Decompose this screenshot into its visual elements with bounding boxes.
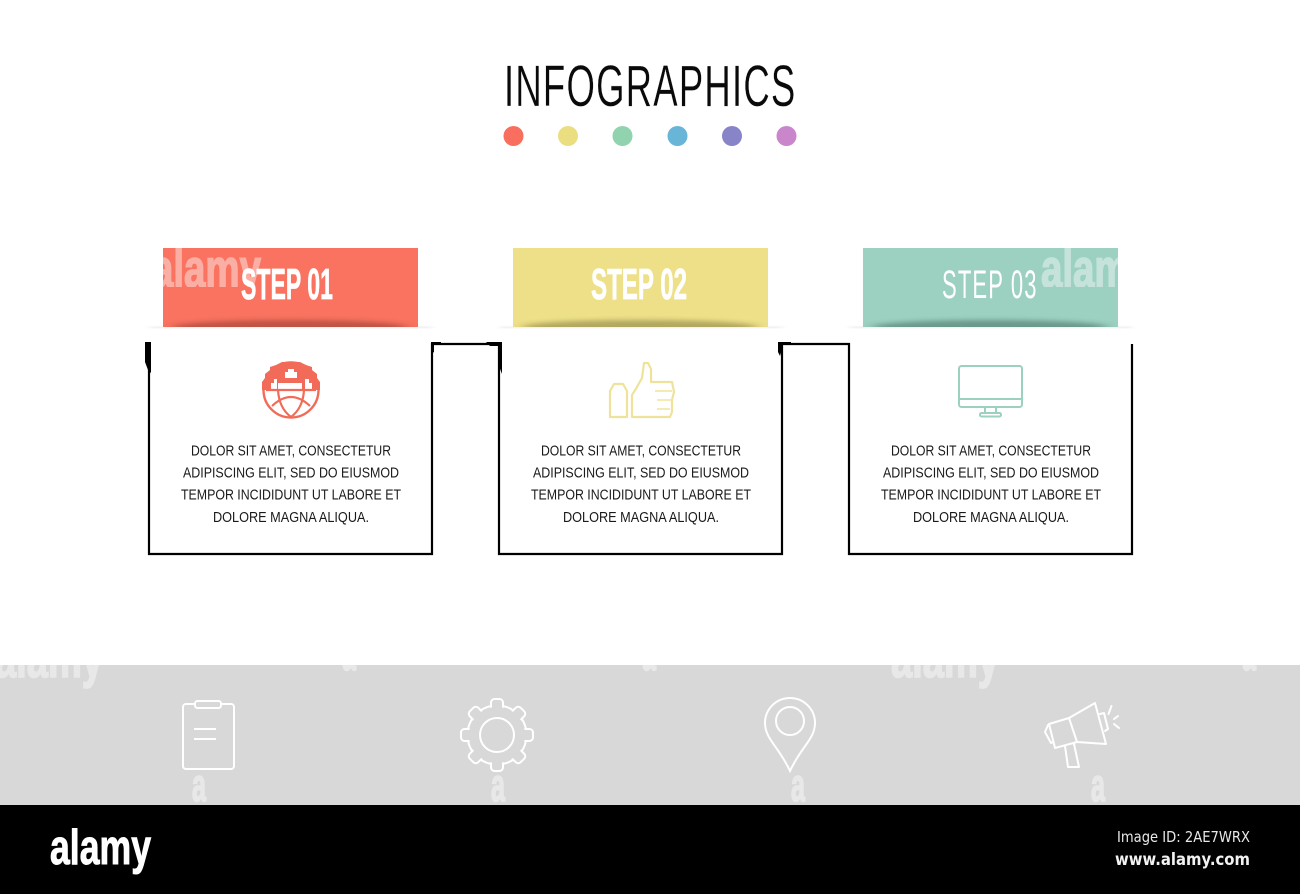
watermarks on grey band (0, 665, 1256, 802)
icon: gear (461, 699, 533, 771)
watermark on step 01: alamy (152, 239, 261, 299)
footer website: www.alamy.com (1115, 850, 1250, 870)
text block: step 03 (881, 444, 1101, 526)
text block: step 03: DOLOR SIT AMET, CONSECTETUR (891, 444, 1091, 460)
step 01 label: STEP 01 (241, 260, 333, 309)
icon: desktop monitor (959, 366, 1022, 416)
icon: location pin (765, 698, 815, 771)
text block: step 02: DOLOR SIT AMET, CONSECTETUR (541, 444, 741, 460)
watermarks on grey band: a (1091, 759, 1105, 811)
text block: step 02: ADIPISCING ELIT, SED DO EIUSMOD (533, 466, 749, 482)
footer logo: alamy (50, 821, 151, 875)
icon: megaphone (1045, 703, 1119, 767)
connecting outline of the three step boxes (145, 342, 1132, 554)
icon: clipboard (183, 701, 234, 769)
watermarks on grey band: alamy (891, 629, 999, 689)
text block: step 03: ADIPISCING ELIT, SED DO EIUSMOD (883, 466, 1099, 482)
text block: step 01 (181, 444, 401, 526)
step 02 label: STEP 02 (591, 260, 687, 309)
panel: step 03 header (851, 248, 1131, 328)
title: INFOGRAPHICS (504, 55, 796, 119)
text block: step 01: ADIPISCING ELIT, SED DO EIUSMOD (183, 466, 399, 482)
watermark on step 03: alamy (1041, 239, 1150, 299)
watermarks on grey band: a (192, 759, 206, 811)
footer image id: Image ID: 2AE7WRX (1117, 828, 1250, 846)
panel: step 01 header (151, 248, 431, 328)
text block: step 03: TEMPOR INCIDIDUNT UT LABORE ET (881, 488, 1101, 504)
text block: step 02: TEMPOR INCIDIDUNT UT LABORE ET (531, 488, 751, 504)
step 03 label: STEP 03 (942, 262, 1038, 307)
icon: globe with helmet (262, 362, 320, 418)
text block: step 03: DOLORE MAGNA ALIQUA. (913, 510, 1069, 526)
panel: grey icon band (0, 665, 1300, 805)
text block: step 01: DOLORE MAGNA ALIQUA. (213, 510, 369, 526)
text block: step 02: DOLORE MAGNA ALIQUA. (563, 510, 719, 526)
text block: step 01: DOLOR SIT AMET, CONSECTETUR (191, 444, 391, 460)
colour dots row (504, 126, 796, 146)
watermarks on grey band: a (342, 628, 356, 680)
icon: thumbs up (610, 363, 674, 417)
panel: step 02 header (500, 248, 782, 334)
watermarks on grey band: a (491, 759, 505, 811)
text block: step 01: TEMPOR INCIDIDUNT UT LABORE ET (181, 488, 401, 504)
watermarks on grey band: a (642, 628, 656, 680)
watermarks on grey band: a (1242, 628, 1256, 680)
panel: black footer (0, 805, 1300, 894)
text block: step 02 (531, 444, 751, 526)
watermarks on grey band: a (791, 759, 805, 811)
